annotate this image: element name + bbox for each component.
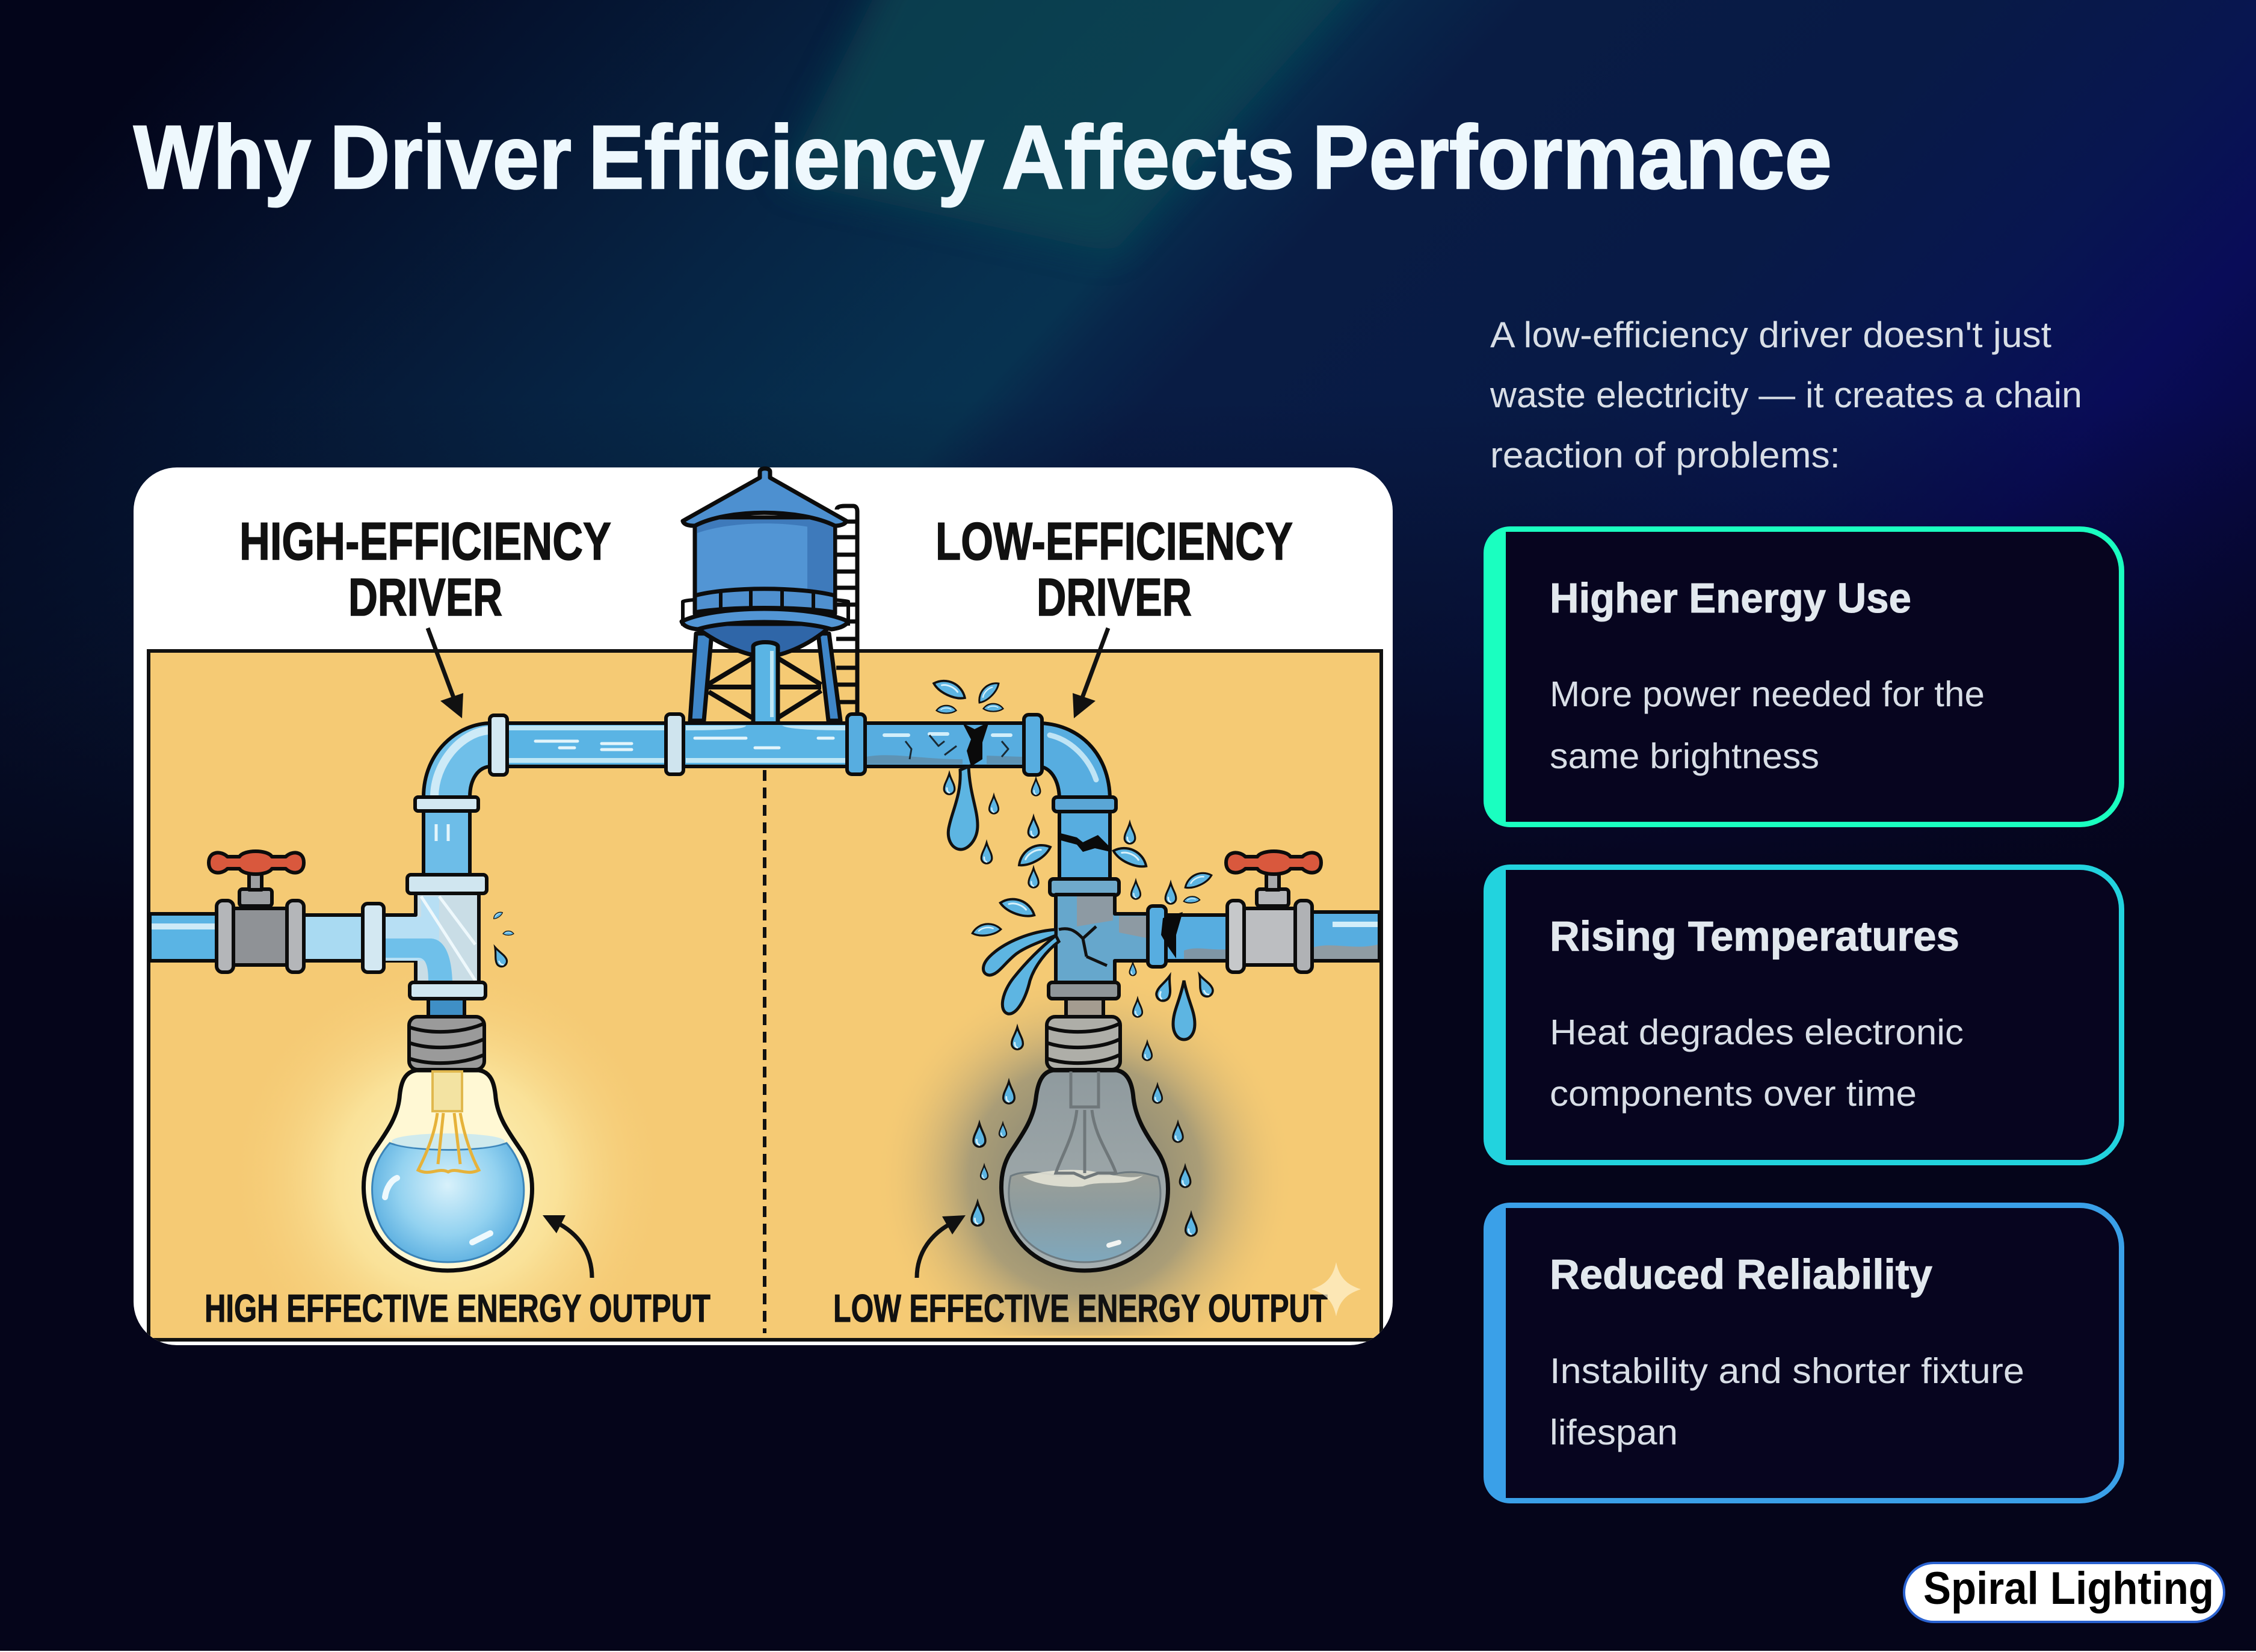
arrow: to low-efficiency pipe xyxy=(1073,628,1108,718)
card body: same brightness xyxy=(1550,736,1819,776)
feed pipe xyxy=(753,643,778,725)
heading: low-efficiency driver: DRIVER xyxy=(1037,567,1192,627)
valve: right xyxy=(1226,851,1321,972)
intro text xyxy=(1490,315,2082,475)
high-efficiency pipe run xyxy=(150,714,848,1017)
title: Performance xyxy=(1312,106,1832,208)
card: reduced reliability xyxy=(1484,1203,2124,1503)
bowl xyxy=(692,624,833,657)
card body: Heat degrades electronic xyxy=(1550,1012,1964,1052)
arrow: to dim bulb xyxy=(917,1215,966,1278)
bulb: bright and full xyxy=(363,1070,532,1271)
title: Driver xyxy=(330,106,572,208)
arrow: to bright bulb xyxy=(543,1215,592,1278)
low-efficiency pipe run xyxy=(847,714,1379,1017)
water drops: leaking pipe xyxy=(944,774,1215,1236)
collar xyxy=(847,714,865,774)
water sprays: leaking pipe xyxy=(932,676,1213,1014)
arrow: to high-efficiency pipe xyxy=(428,628,463,718)
card body: More power needed for the xyxy=(1550,674,1985,714)
legs xyxy=(690,633,712,721)
card body: components over time xyxy=(1550,1074,1917,1114)
deck xyxy=(682,609,848,629)
heading: low-efficiency driver xyxy=(935,511,1293,627)
water tower xyxy=(682,469,857,725)
card: higher energy use xyxy=(1484,526,2124,827)
intro text: A low-efficiency driver doesn't just xyxy=(1490,315,2051,355)
ladder xyxy=(836,506,857,716)
heading: low-efficiency driver: LOW-EFFICIENCY xyxy=(935,511,1293,571)
logo: Spiral Lighting: Spiral Lighting xyxy=(1923,1563,2214,1614)
card: rising temperatures xyxy=(1484,865,2124,1165)
vertical pipe xyxy=(424,797,470,877)
collar: elbow xyxy=(490,715,507,775)
card body xyxy=(1550,1012,1964,1114)
intro text: reaction of problems: xyxy=(1490,435,1840,475)
railing xyxy=(683,598,848,626)
card title: Reduced Reliability xyxy=(1550,1251,1932,1298)
T body xyxy=(383,893,479,982)
heading: high-efficiency driver xyxy=(239,511,611,627)
small drips: left xyxy=(490,910,514,968)
collar: mid xyxy=(666,714,683,774)
cracks xyxy=(963,722,1183,966)
right supply pipe xyxy=(1310,912,1379,961)
intro text: waste electricity — it creates a chain xyxy=(1490,375,2082,415)
heading: high-efficiency driver: DRIVER xyxy=(348,567,502,627)
catwalk band xyxy=(695,589,835,612)
title xyxy=(134,106,1832,208)
card body: lifespan xyxy=(1550,1413,1678,1452)
tank xyxy=(695,517,835,614)
title: Affects xyxy=(1002,106,1295,208)
roof xyxy=(683,469,846,526)
cracked main pipe xyxy=(847,723,1040,766)
sparkle xyxy=(1311,1262,1361,1316)
card body xyxy=(1550,674,1985,776)
main pipe xyxy=(490,723,848,766)
bulb: dim and murky xyxy=(1001,1070,1168,1271)
title: Efficiency xyxy=(588,106,984,208)
card title: Higher Energy Use xyxy=(1550,575,1911,621)
card body xyxy=(1550,1351,2024,1452)
divider xyxy=(763,770,766,1333)
vertical pipe xyxy=(1059,797,1110,881)
card title: Rising Temperatures xyxy=(1550,913,1959,960)
card body: Instability and shorter fixture xyxy=(1550,1351,2024,1391)
valve: left xyxy=(209,851,304,972)
bulb socket: left xyxy=(409,1017,484,1070)
elbow xyxy=(424,723,492,797)
title: Why xyxy=(134,106,311,208)
left supply pipe xyxy=(150,914,219,961)
heading: high-efficiency driver: HIGH-EFFICIENCY xyxy=(239,511,611,571)
caption: low effective energy output: LOW EFFECTIVE ENERGY OUTPUT xyxy=(833,1286,1328,1330)
panel: pipe illustration xyxy=(134,467,1393,1345)
caption: high effective energy output: HIGH EFFECTIVE ENERGY OUTPUT xyxy=(205,1286,710,1330)
braces xyxy=(707,658,821,718)
side pipe and T xyxy=(1056,895,1152,982)
bulb socket: right xyxy=(1047,1017,1120,1070)
elbow xyxy=(1038,723,1110,800)
